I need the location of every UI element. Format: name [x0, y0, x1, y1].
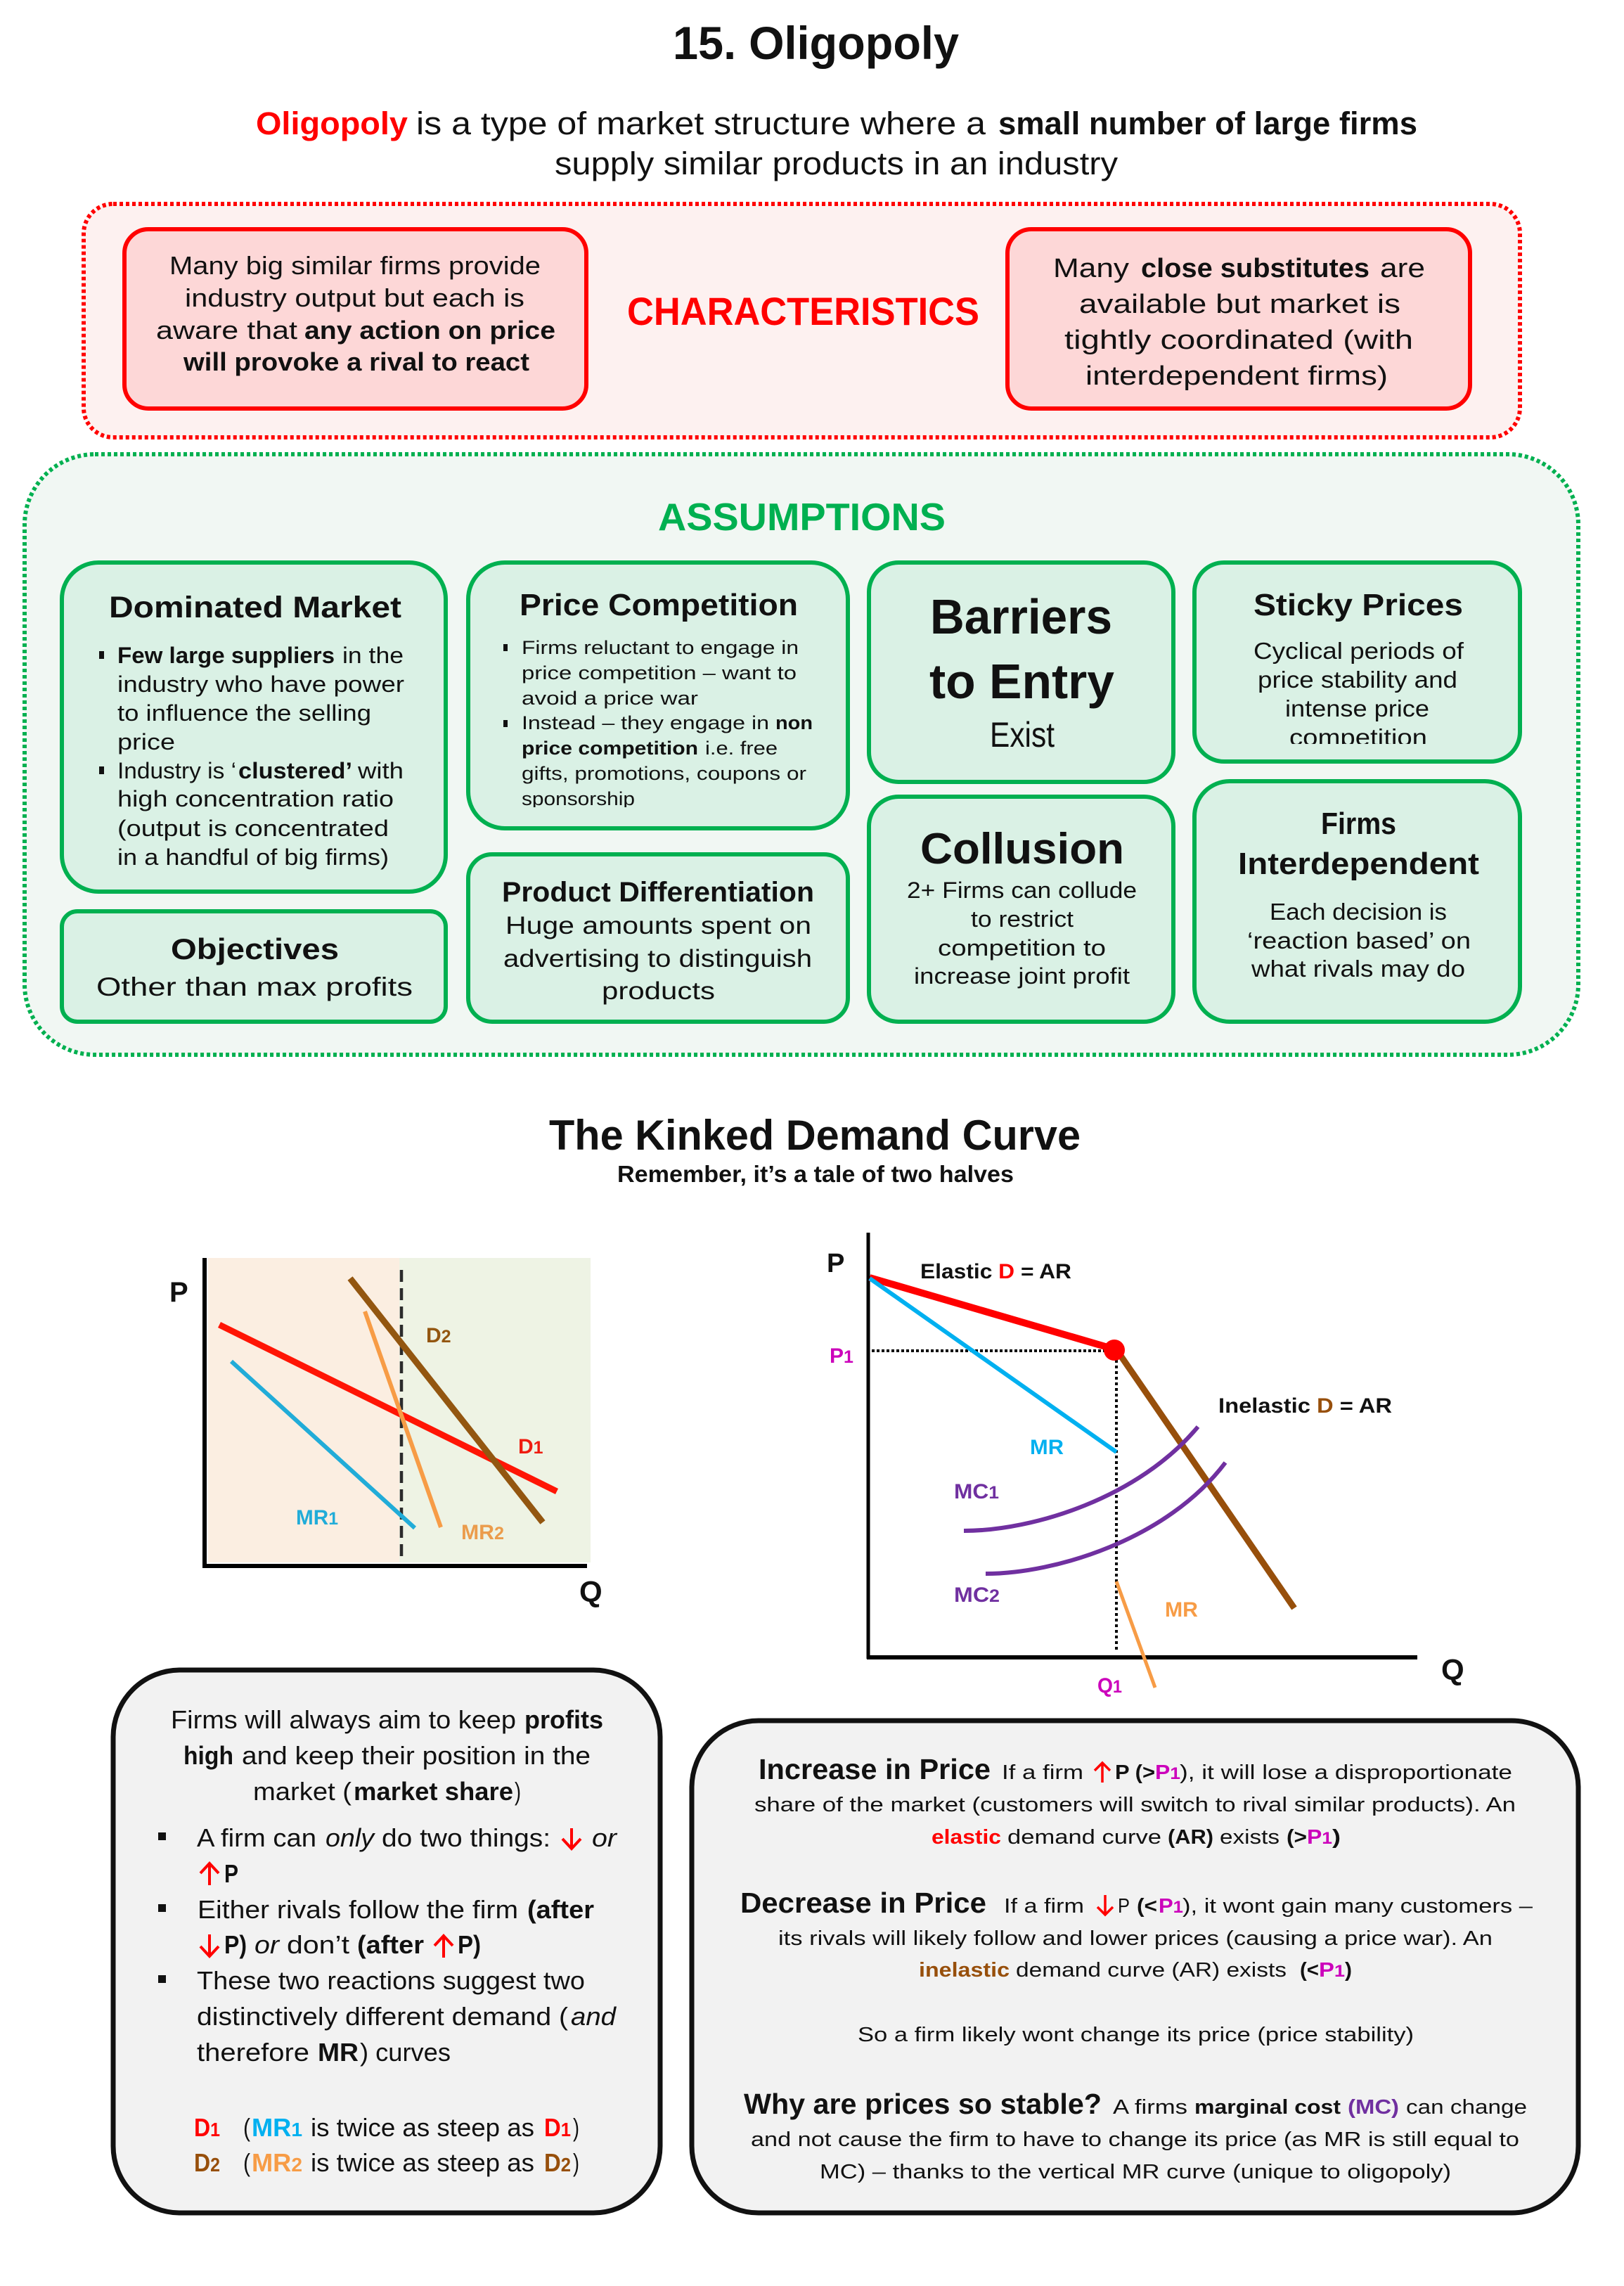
heading: characteristics: CHARACTERISTICS [627, 289, 979, 333]
kink point [1104, 1340, 1125, 1361]
bullet list: (after [357, 1930, 424, 1959]
axis label: Q: Q [1441, 1653, 1464, 1686]
card: price competition: Price Competition [520, 588, 798, 622]
heading: assumptions: ASSUMPTIONS [658, 495, 946, 539]
key: D1 [194, 2113, 579, 2142]
card: firms interdependent: what rivals may do [1251, 956, 1465, 982]
text: decrease in price [740, 1887, 1533, 1982]
card: barriers to entry [869, 563, 1173, 782]
card: barriers to entry: Barriers [930, 589, 1112, 644]
bullet list: ) curves [360, 2038, 451, 2067]
definition text: Oligopoly [256, 105, 408, 141]
bullet list: P) [458, 1930, 481, 1959]
card: objectives [62, 911, 446, 1022]
key: D2: ) [573, 2148, 579, 2177]
card: dominated market: industry who have power [117, 672, 404, 697]
card: objectives: Other than max profits [96, 972, 413, 1001]
panel: firm reactions: Firms will always aim to keep [171, 1705, 516, 1734]
card: price competition: gifts, promotions, coupons or [522, 763, 806, 784]
card: objectives: Objectives [171, 932, 339, 965]
text: decrease in price: ), it wont gain many customers – [1182, 1895, 1533, 1918]
card: product differentiation: advertising to distinguish [503, 945, 812, 972]
card: dominated market: in a handful of big firms) [117, 845, 389, 870]
text: increase in price: P1 [1155, 1761, 1180, 1784]
curve: MC2 [986, 1463, 1225, 1574]
card: collusion: 2+ Firms can collude [907, 878, 1137, 903]
text: decrease in price: P [1118, 1895, 1130, 1918]
text: increase in price: P1 [1307, 1826, 1332, 1849]
card: dominated market: price [117, 729, 175, 754]
bullet list: therefore [197, 2038, 309, 2067]
key: D2: D2 [194, 2148, 220, 2177]
text: increase in price: P (> [1115, 1761, 1155, 1784]
characteristic: big similar firms: will provoke a rival to react [183, 347, 529, 376]
card: firms interdependent: Each decision is [1270, 899, 1447, 925]
label: MR1: MR1 [296, 1506, 338, 1529]
bullet list: Either rivals follow the firm [198, 1895, 518, 1924]
card: price competition: price competition – want to [522, 662, 797, 683]
characteristic: big similar firms: aware that [156, 316, 297, 345]
text: increase in price: ) [1332, 1826, 1341, 1849]
card: price competition: avoid a price war [522, 688, 698, 709]
panel: price explanation [692, 1721, 1578, 2213]
characteristic: big similar firms: any action on price [304, 316, 555, 345]
characteristic: big similar firms [124, 229, 586, 409]
label: Q1: Q1 [1097, 1674, 1122, 1697]
text: why are prices stable: A firms [1113, 2096, 1187, 2119]
subheading: Remember, it’s a tale of two halves [617, 1161, 1014, 1187]
card: price competition: Firms reluctant to engage in [522, 637, 799, 658]
curve: MC1 [964, 1427, 1198, 1531]
card: product differentiation: products [602, 977, 715, 1005]
card: sticky prices: price stability and [1258, 667, 1457, 693]
bullet list: P [224, 1859, 238, 1888]
text: decrease in price: its rivals will likely follow and lower prices (causing a price war). An [778, 1927, 1493, 1950]
text: why are prices stable: marginal cost [1194, 2096, 1341, 2119]
bullet list: or [254, 1930, 281, 1959]
card: dominated market: clustered’ [238, 758, 352, 783]
card: firms interdependent: Firms [1321, 807, 1396, 841]
bullet list: P) [224, 1930, 247, 1959]
card: price competition [468, 563, 848, 828]
bullet list: A firm can [197, 1823, 316, 1852]
axis label: P: P [169, 1277, 188, 1308]
text: increase in price: If a firm [1002, 1761, 1083, 1784]
label: D2: D2 [426, 1324, 451, 1347]
label: MR2: MR2 [461, 1521, 504, 1544]
key: D1: D1 [194, 2113, 220, 2142]
curve: MR1 [231, 1361, 415, 1528]
bullet list: and [571, 2002, 617, 2031]
bullet list: MR [318, 2038, 359, 2067]
key: D1: MR1 [252, 2113, 302, 2142]
key: D2: is twice as steep as [311, 2148, 534, 2177]
curve: MR inelastic [1116, 1581, 1155, 1688]
text: increase in price: exists [1220, 1826, 1280, 1849]
key: D1: ) [573, 2113, 579, 2142]
characteristic: close substitutes: available but market is [1079, 290, 1400, 319]
text: increase in price: Increase in Price [759, 1753, 991, 1785]
curve: inelastic demand [1119, 1354, 1294, 1608]
characteristic: close substitutes: close substitutes [1141, 254, 1370, 283]
bullet list: only [326, 1823, 375, 1852]
card: collusion: to restrict [971, 906, 1074, 932]
card: price competition: i.e. free [705, 738, 778, 759]
card: collusion: increase joint profit [914, 963, 1130, 989]
text: decrease in price: inelastic [919, 1959, 1010, 1982]
card: firms interdependent: ‘reaction based’ on [1247, 927, 1471, 953]
card: dominated market [62, 563, 446, 892]
bullet list: or [592, 1823, 618, 1852]
characteristic: big similar firms: industry output but each is [185, 283, 524, 312]
characteristic: close substitutes: Many [1053, 254, 1129, 283]
card: collusion: competition to [938, 935, 1106, 961]
panel: firm reactions [113, 1670, 660, 2213]
characteristic: big similar firms: Many big similar firms provide [169, 251, 541, 280]
text: increase in price [754, 1753, 1516, 1849]
text: why are prices stable [744, 2088, 1527, 2183]
text: decrease in price: P1 [1319, 1959, 1345, 1982]
key: D2 [194, 2148, 579, 2177]
panel: firm reactions: profits [524, 1705, 603, 1734]
panel: firm reactions: market ( [253, 1777, 352, 1806]
card: collusion: Collusion [920, 825, 1124, 873]
panel: firm reactions: high [183, 1741, 233, 1770]
definition text: small number of large firms [998, 105, 1417, 141]
card: product differentiation: Huge amounts spent on [505, 912, 811, 939]
curve: D2 [350, 1278, 543, 1522]
card: price competition: Instead – they engage in [522, 712, 769, 733]
text: decrease in price: P1 [1159, 1895, 1183, 1918]
label: MR elastic: MR [1030, 1436, 1064, 1459]
card: sticky prices: Sticky Prices [1254, 588, 1463, 622]
panel: firm reactions: and keep their position in the [242, 1741, 591, 1770]
card: barriers to entry: to Entry [929, 654, 1114, 709]
label: MR inelastic: MR [1165, 1598, 1198, 1622]
chart: two demand curves [169, 1258, 602, 1608]
card: dominated market: with [357, 758, 404, 783]
label: MC1: MC1 [954, 1480, 999, 1503]
key: D2: D2 [544, 2148, 571, 2177]
key: D2: MR2 [252, 2148, 302, 2177]
panel: firm reactions: ) [515, 1777, 521, 1806]
characteristic: close substitutes: interdependent firms) [1085, 361, 1388, 391]
text: decrease in price: demand curve (AR) exists [1016, 1959, 1287, 1982]
card: firms interdependent: Interdependent [1238, 847, 1479, 881]
characteristic: close substitutes [1007, 229, 1470, 409]
card: dominated market: Few large suppliers [117, 643, 335, 668]
heading: kinked demand curve: The Kinked Demand Curve [549, 1112, 1081, 1159]
text: price stability: So a firm likely wont change its price (price stability) [858, 2024, 1414, 2046]
text: decrease in price: (< [1300, 1959, 1319, 1982]
characteristic: close substitutes: are [1380, 254, 1425, 283]
definition text: is a type of market structure where a [416, 105, 986, 141]
characteristic: close substitutes: tightly coordinated (with [1064, 326, 1413, 355]
panel: assumptions [25, 454, 1578, 1055]
card: price competition: price competition [522, 738, 698, 759]
card: sticky prices: Cyclical periods of [1254, 638, 1464, 664]
text: increase in price: (AR) [1168, 1826, 1213, 1849]
text: increase in price: elastic [932, 1826, 1001, 1849]
curve: MR2 [365, 1311, 441, 1527]
title: 15. Oligopoly [673, 17, 959, 69]
text: decrease in price: If a firm [1004, 1895, 1084, 1918]
card: price competition: sponsorship [522, 788, 635, 809]
card: sticky prices: competition [1289, 724, 1427, 750]
curve: D1 [219, 1325, 557, 1491]
text: increase in price: ), it will lose a disproportionate [1180, 1761, 1512, 1784]
key: D1: is twice as steep as [311, 2113, 534, 2142]
card: dominated market: to influence the selling [117, 700, 371, 726]
label: D1: D1 [518, 1435, 543, 1458]
text: decrease in price: Decrease in Price [740, 1887, 986, 1919]
card: dominated market: Dominated Market [109, 591, 401, 624]
text: decrease in price: ) [1345, 1959, 1352, 1982]
label: MC2: MC2 [954, 1584, 1000, 1607]
text: decrease in price: (< [1137, 1895, 1157, 1918]
card: sticky prices [1194, 563, 1520, 762]
bullet list [158, 1823, 618, 2067]
card: dominated market: Industry is ‘ [117, 758, 236, 783]
card: sticky prices: intense price [1285, 695, 1429, 721]
text: increase in price: share of the market (customers will switch to rival similar products). An [754, 1794, 1516, 1816]
curve: MR elastic [870, 1278, 1116, 1452]
label: inelastic D = AR: Inelastic D = AR [1218, 1394, 1392, 1418]
chart: kinked demand curve [827, 1233, 1464, 1697]
card: barriers to entry: Exist [990, 715, 1055, 754]
card: product differentiation [468, 854, 848, 1022]
text: why are prices stable: and not cause the firm to have to change its price (as MR is still equal to [751, 2128, 1519, 2151]
card: product differentiation: Product Differentiation [502, 877, 814, 908]
key: D1: ( [243, 2113, 250, 2142]
card: collusion [869, 797, 1173, 1022]
card: dominated market: (output is concentrated [117, 816, 389, 841]
axis label: P: P [827, 1249, 844, 1278]
axis label: Q: Q [579, 1575, 602, 1608]
panel: firm reactions: market share [354, 1777, 513, 1806]
card: dominated market: high concentration ratio [117, 786, 394, 811]
bullet list: These two reactions suggest two [197, 1966, 585, 1995]
card: price competition: non [775, 712, 813, 733]
label: elastic D = AR: Elastic D = AR [920, 1260, 1071, 1283]
panel: characteristics [84, 204, 1520, 437]
card: firms interdependent [1194, 781, 1520, 1022]
text: increase in price: (> [1287, 1826, 1307, 1849]
key: D2: ( [243, 2148, 250, 2177]
curve: elastic demand [870, 1278, 1115, 1349]
bullet list: don’t [287, 1930, 349, 1959]
definition text: supply similar products in an industry [555, 146, 1119, 181]
bullet list: do two things: [382, 1823, 550, 1852]
bullet list: distinctively different demand ( [197, 2002, 568, 2031]
text: why are prices stable: (MC) [1348, 2096, 1399, 2119]
text: why are prices stable: can change [1406, 2096, 1527, 2119]
card: dominated market: in the [342, 643, 404, 668]
text: increase in price: demand curve [1007, 1826, 1161, 1849]
text: why are prices stable: Why are prices so stable? [744, 2088, 1102, 2120]
key: D1: D1 [544, 2113, 571, 2142]
text: why are prices stable: MC) – thanks to the vertical MR curve (unique to oligopoly) [820, 2161, 1451, 2183]
bullet list: (after [527, 1895, 594, 1924]
label: P1: P1 [830, 1344, 853, 1368]
definition text [256, 105, 1417, 181]
